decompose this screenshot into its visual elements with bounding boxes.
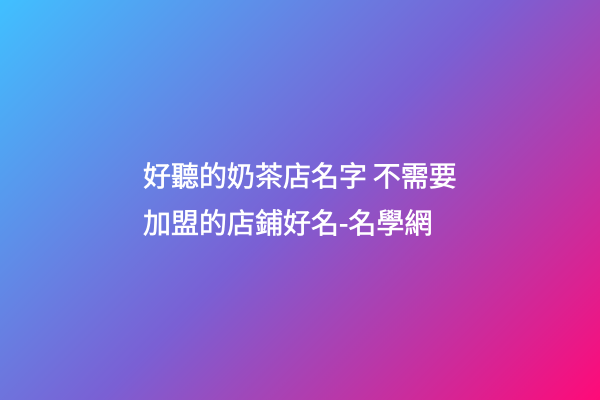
title: 加盟的店鋪好名-名學網 (143, 208, 432, 239)
title: 好聽的奶茶店名字 不需要 (143, 161, 457, 192)
title (143, 161, 457, 239)
